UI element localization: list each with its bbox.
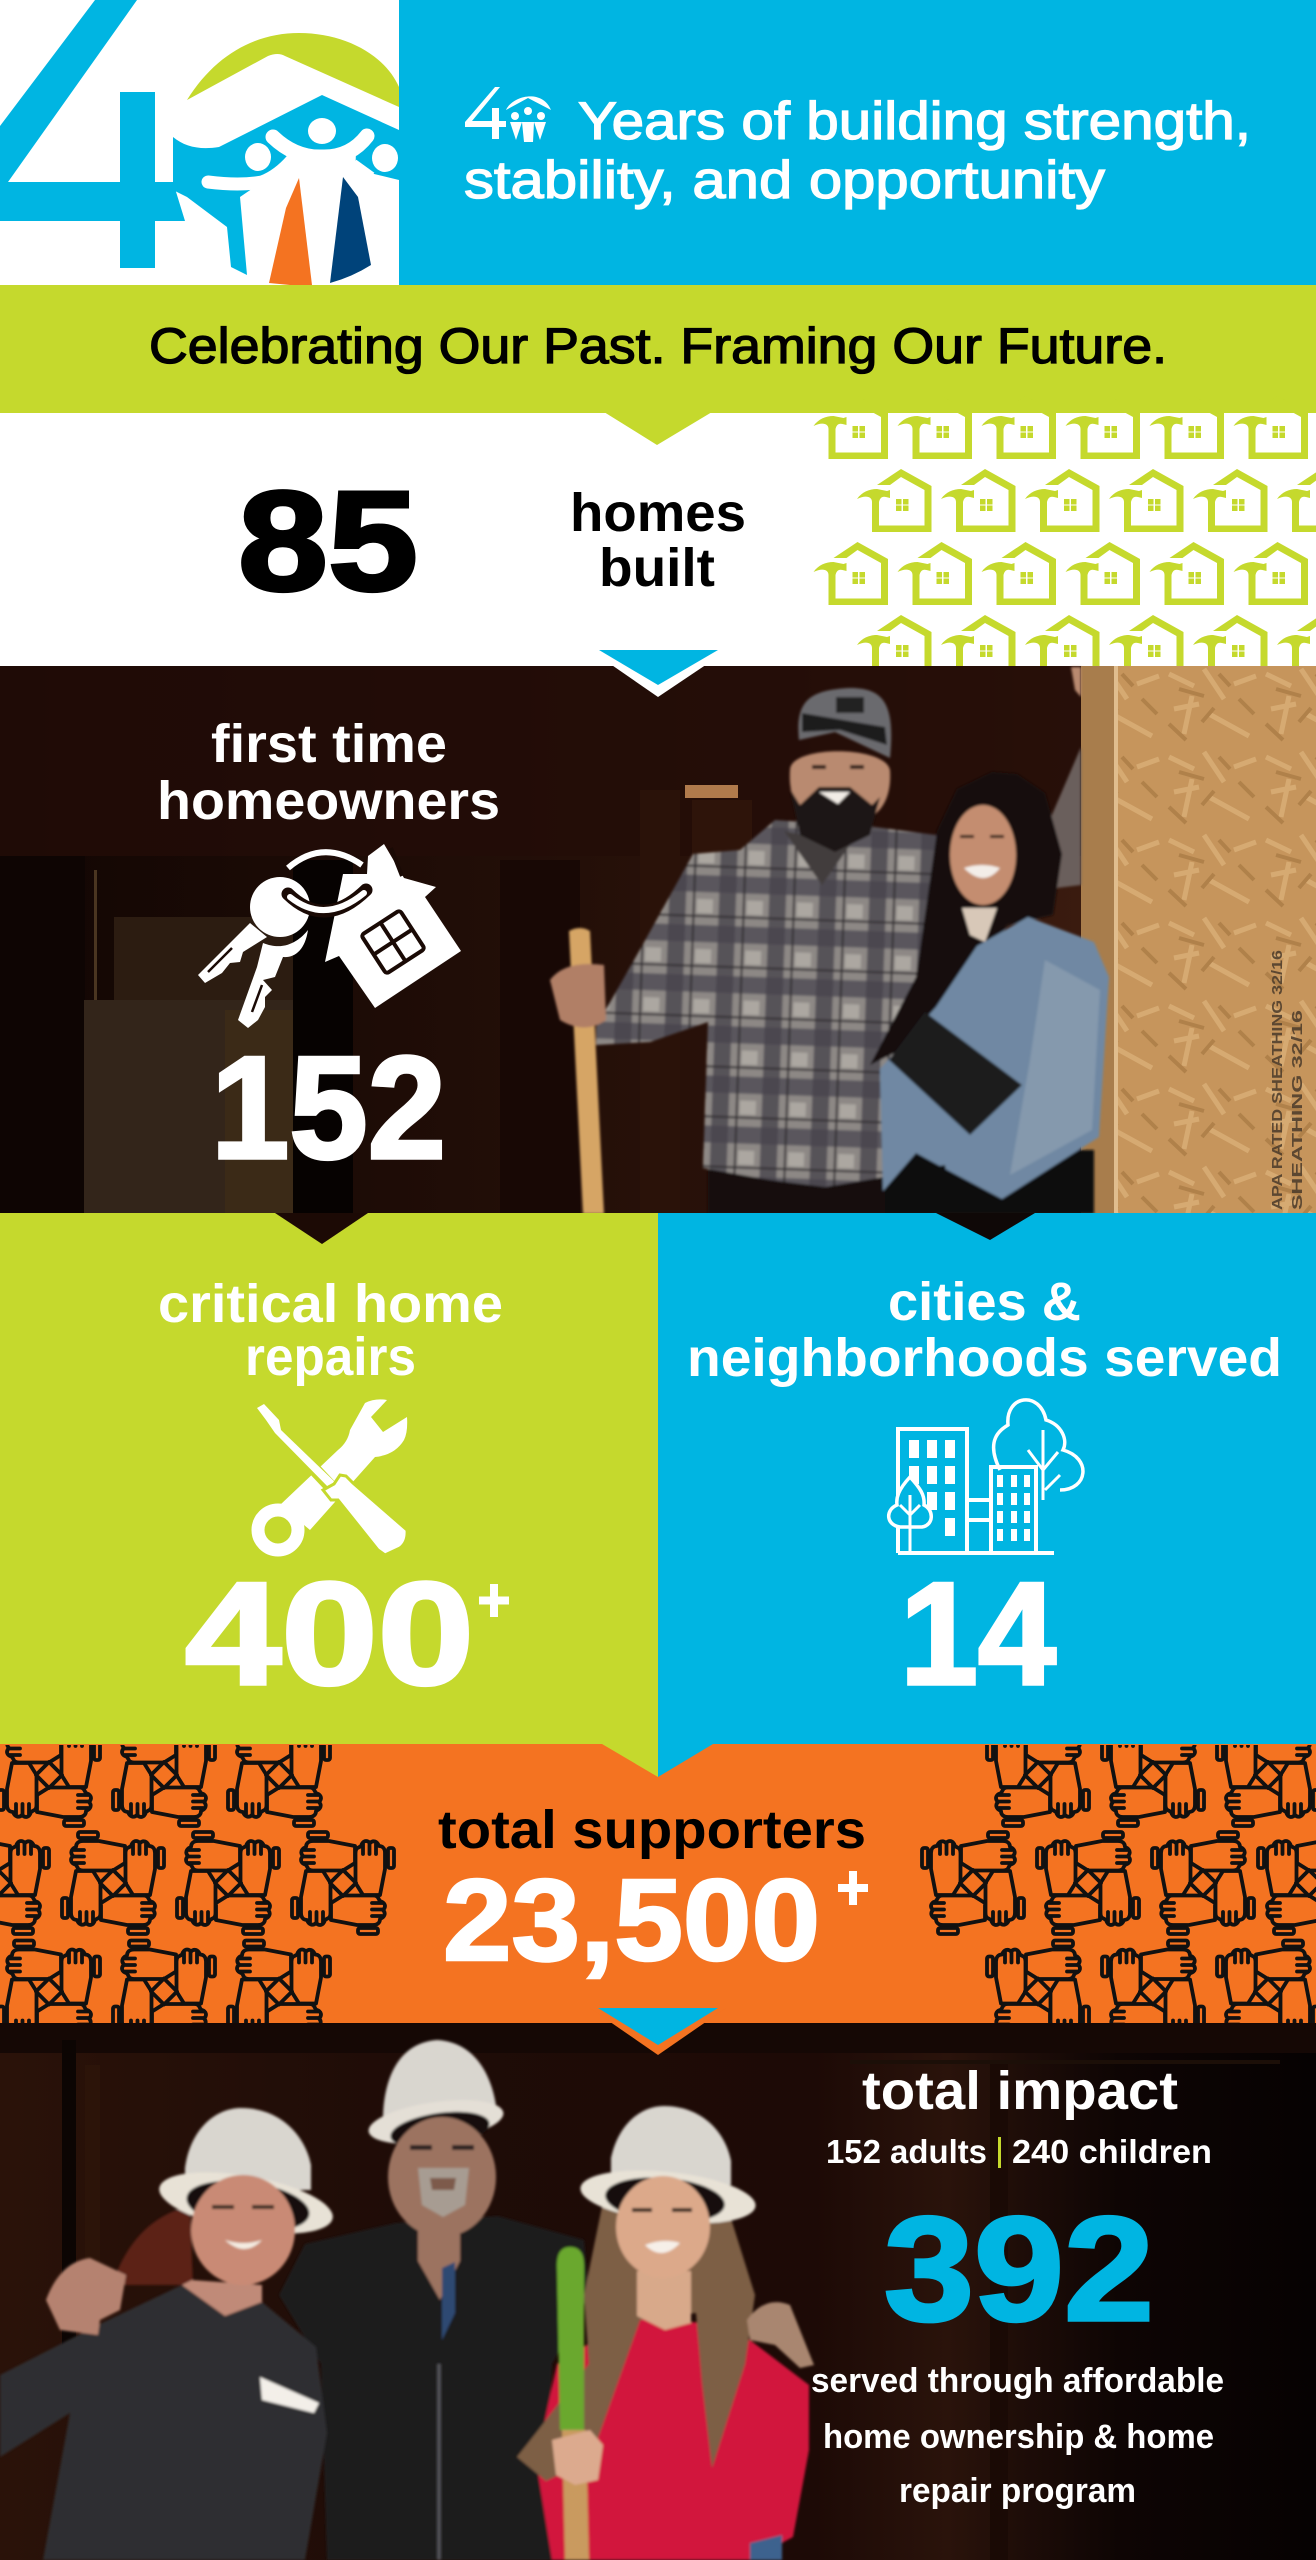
text: cities and neighborhoods served: neighborhoods served <box>687 1328 1282 1388</box>
stat: 400+: 400 <box>185 1552 474 1715</box>
label: homes built: homes <box>570 483 746 543</box>
house pattern <box>814 396 1316 678</box>
photo: OSB wall: APA RATED SHEATHING 32/16 <box>1269 950 1286 1210</box>
tagline text: Celebrating Our Past. Framing Our Future. <box>149 318 1167 374</box>
text: served description <box>811 2362 1224 2510</box>
icon: wrench and screwdriver <box>257 1399 407 1555</box>
photo: homeowners couple <box>550 667 1109 1214</box>
panel: homes built <box>0 396 1316 678</box>
photo: OSB wall: SHEATHING 32/16 <box>1289 1010 1306 1210</box>
text: served description: served through affordable <box>811 2362 1224 2400</box>
text: served description: repair program <box>899 2472 1136 2510</box>
panel: first time homeowners photo <box>0 666 1316 1214</box>
logo house and figures <box>173 95 399 285</box>
arrow: blue chevron into photo <box>590 650 728 697</box>
text: critical home repairs: critical home <box>158 1274 503 1334</box>
panel: cities and neighborhoods served <box>658 1213 1316 1745</box>
arrow: blue chevron with orange edge <box>590 2008 726 2055</box>
panel: blue header band <box>399 0 1316 285</box>
text: total impact: total impact <box>862 2061 1178 2121</box>
photo background <box>0 2023 1316 2560</box>
icon: city buildings and trees <box>889 1400 1083 1553</box>
label: homes built <box>570 483 746 598</box>
text: adults and children <box>826 2133 1212 2170</box>
panel: critical home repairs <box>0 1213 658 1745</box>
panel: tagline band <box>0 285 1316 413</box>
text: critical home repairs: repairs <box>245 1327 416 1387</box>
text: adults and children: 240 children <box>1012 2133 1212 2170</box>
text: cities and neighborhoods served <box>687 1272 1282 1388</box>
stat: 85: 85 <box>238 462 418 621</box>
label: homes built: built <box>599 538 715 598</box>
photo: OSB wall <box>1081 666 1316 1214</box>
panel: total supporters <box>0 1724 1316 2042</box>
stat: 23,500+: 23,500 <box>443 1855 820 1985</box>
icon: keys and house keychain <box>198 844 461 1028</box>
stat: 14: 14 <box>900 1552 1056 1715</box>
text: cities and neighborhoods served: cities & <box>888 1272 1081 1332</box>
text: critical home repairs <box>158 1274 503 1387</box>
big numeral 4 <box>0 0 185 268</box>
text: total supporters: total supporters <box>438 1800 866 1860</box>
photo: three people in hard hats <box>0 2040 814 2560</box>
stat: 392: 392 <box>884 2187 1154 2352</box>
text: served description: home ownership & home <box>823 2418 1214 2456</box>
panel: header logo on white <box>0 0 399 285</box>
text: first time homeowners: first time <box>211 714 447 774</box>
header text: Years of building strength, <box>578 92 1251 151</box>
text: adults and children: 152 adults <box>826 2133 987 2170</box>
arrow: dark tab right <box>936 1213 1035 1240</box>
text: first time homeowners: homeowners <box>157 771 500 831</box>
panel: total impact photo <box>0 2023 1316 2560</box>
header text <box>464 92 1251 210</box>
arrow: lime and blue tab <box>602 1744 713 1777</box>
pattern: hands left <box>0 1745 396 2023</box>
logo roof arc <box>187 33 399 107</box>
text: first time homeowners <box>157 714 500 831</box>
icon: small 40 logo <box>465 87 551 142</box>
arrow: lime tab <box>604 412 712 445</box>
pattern: hands right <box>920 1745 1316 2023</box>
header text: stability, and opportunity <box>464 151 1106 210</box>
stat: 152: 152 <box>211 1026 446 1189</box>
photo background <box>0 666 1082 1214</box>
arrow: dark tab left <box>275 1213 368 1244</box>
